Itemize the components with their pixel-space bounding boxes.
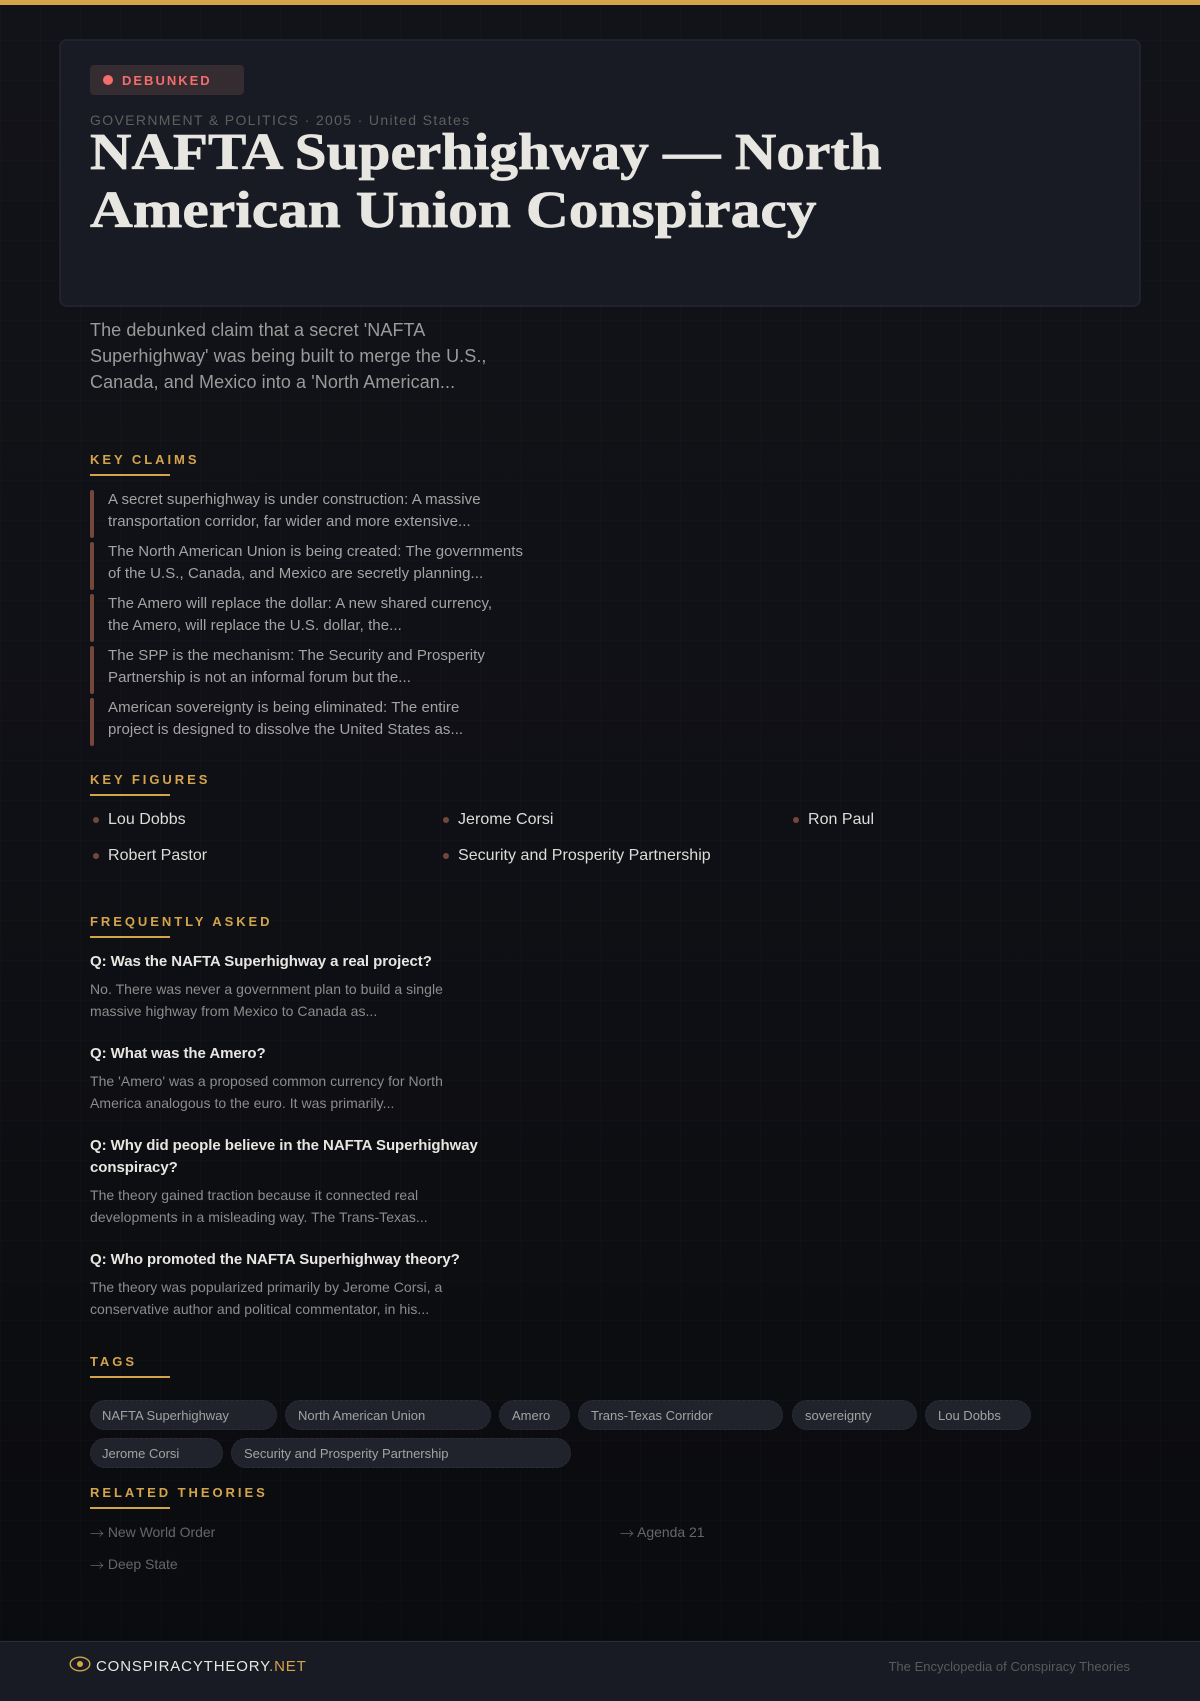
section heading: tags: TAGS: [90, 1354, 137, 1369]
tag: Lou Dobbs: Lou Dobbs: [938, 1408, 1001, 1423]
faq 2 answer: The 'Amero' was a proposed common currency for North: [90, 1073, 443, 1089]
faq 2 answer: America analogous to the euro. It was primarily...: [90, 1095, 394, 1111]
figure: Ron Paul: Ron Paul: [808, 811, 874, 828]
faq 3 question: Q: Why did people believe in the NAFTA Superhighway: [90, 1137, 478, 1154]
claim 1: [90, 490, 481, 538]
section heading: related theories: RELATED THEORIES: [90, 1485, 268, 1500]
tag: Lou Dobbs: [925, 1400, 1031, 1430]
claim 3: The Amero will replace the dollar: A new shared currency,: [108, 595, 492, 612]
figure: Robert Pastor: Robert Pastor: [108, 847, 207, 864]
tag: sovereignty: sovereignty: [805, 1408, 871, 1423]
tag: North American Union: [285, 1400, 491, 1430]
claim 5: American sovereignty is being eliminated: The entire: [108, 699, 459, 716]
faq 2 question: Q: What was the Amero?: [90, 1045, 266, 1062]
footer: [0, 1641, 1200, 1701]
footer tagline: The Encyclopedia of Conspiracy Theories: [888, 1659, 1130, 1674]
summary text: The debunked claim that a secret 'NAFTA: [90, 320, 425, 340]
tag: sovereignty: [792, 1400, 917, 1430]
faq 3 question: conspiracy?: [90, 1159, 178, 1176]
faq 4 answer: conservative author and political commentator, in his...: [90, 1301, 429, 1317]
footer logo text: CONSPIRACYTHEORY.NET: [96, 1658, 307, 1675]
tag: NAFTA Superhighway: [90, 1400, 277, 1430]
faq 3 answer: The theory gained traction because it connected real: [90, 1187, 418, 1203]
tag: Trans-Texas Corridor: [578, 1400, 783, 1430]
tag: Security and Prosperity Partnership: [231, 1438, 571, 1468]
claim 3: the Amero, will replace the U.S. dollar, the...: [108, 617, 402, 634]
claim 1: A secret superhighway is under construction: A massive: [108, 491, 481, 508]
claim 5: [90, 698, 463, 746]
badge label: DEBUNKED: [122, 73, 212, 88]
claim 2: [90, 542, 523, 590]
claim 5: project is designed to dissolve the United States as...: [108, 721, 463, 738]
claim 2: of the U.S., Canada, and Mexico are secretly planning...: [108, 565, 483, 582]
related link: Agenda 21: → Agenda 21: [620, 1524, 705, 1544]
badge: debunked: [90, 65, 244, 95]
faq 1 answer: massive highway from Mexico to Canada as...: [90, 1003, 377, 1019]
category line: GOVERNMENT & POLITICS · 2005 · United States: [90, 112, 470, 128]
summary text: Superhighway' was being built to merge the U.S.,: [90, 346, 486, 366]
faq 4 question: Q: Who promoted the NAFTA Superhighway theory?: [90, 1251, 460, 1268]
panel: header card: [59, 39, 1141, 307]
faq 1 answer: [90, 981, 443, 1019]
related link: Deep State: → Deep State: [90, 1556, 178, 1576]
section heading: key claims: KEY CLAIMS: [90, 452, 199, 467]
section heading: frequently asked: FREQUENTLY ASKED: [90, 914, 273, 929]
tag: Jerome Corsi: Jerome Corsi: [102, 1446, 179, 1461]
title: NAFTA Superhighway — North: [90, 124, 882, 181]
faq 3 answer: developments in a misleading way. The Trans-Texas...: [90, 1209, 428, 1225]
claim 4: Partnership is not an informal forum but the...: [108, 669, 411, 686]
claim 2: The North American Union is being created: The governments: [108, 543, 523, 560]
faq 2 answer: [90, 1073, 443, 1111]
tag: North American Union: North American Union: [298, 1408, 425, 1423]
tag: Security and Prosperity Partnership: Security and Prosperity Partnership: [244, 1446, 448, 1461]
panel: key claims list: [90, 490, 523, 746]
tag: Jerome Corsi: [90, 1438, 223, 1468]
faq 4 answer: The theory was popularized primarily by Jerome Corsi, a: [90, 1279, 442, 1295]
top accent bar: [0, 0, 1200, 5]
claim 4: [90, 646, 485, 694]
summary text: Canada, and Mexico into a 'North American...: [90, 372, 455, 392]
tag: NAFTA Superhighway: NAFTA Superhighway: [102, 1408, 229, 1423]
title: American Union Conspiracy: [90, 182, 816, 239]
faq 1 answer: No. There was never a government plan to build a single: [90, 981, 443, 997]
claim 1: transportation corridor, far wider and more extensive...: [108, 513, 471, 530]
tag: Amero: Amero: [512, 1408, 550, 1423]
summary text: [90, 320, 486, 392]
tag: Trans-Texas Corridor: Trans-Texas Corridor: [591, 1408, 713, 1423]
title: [90, 124, 882, 239]
section heading: key figures: KEY FIGURES: [90, 772, 210, 787]
badge dot: [103, 75, 113, 85]
figure: Jerome Corsi: Jerome Corsi: [458, 811, 554, 828]
claim 3: [90, 594, 492, 642]
icon: eye logo: [70, 1656, 90, 1672]
faq 1 question: Q: Was the NAFTA Superhighway a real project?: [90, 953, 432, 970]
faq 3 question: [90, 1137, 478, 1176]
faq 4 answer: [90, 1279, 442, 1317]
related link: New World Order: → New World Order: [90, 1524, 215, 1544]
claim 4: The SPP is the mechanism: The Security and Prosperity: [108, 647, 485, 664]
figure: Lou Dobbs: Lou Dobbs: [108, 811, 186, 828]
faq 3 answer: [90, 1187, 428, 1225]
tag: Amero: [499, 1400, 570, 1430]
panel: key figures list: [93, 811, 874, 864]
figure: Security and Prosperity Partnership: Security and Prosperity Partnership: [458, 847, 711, 864]
